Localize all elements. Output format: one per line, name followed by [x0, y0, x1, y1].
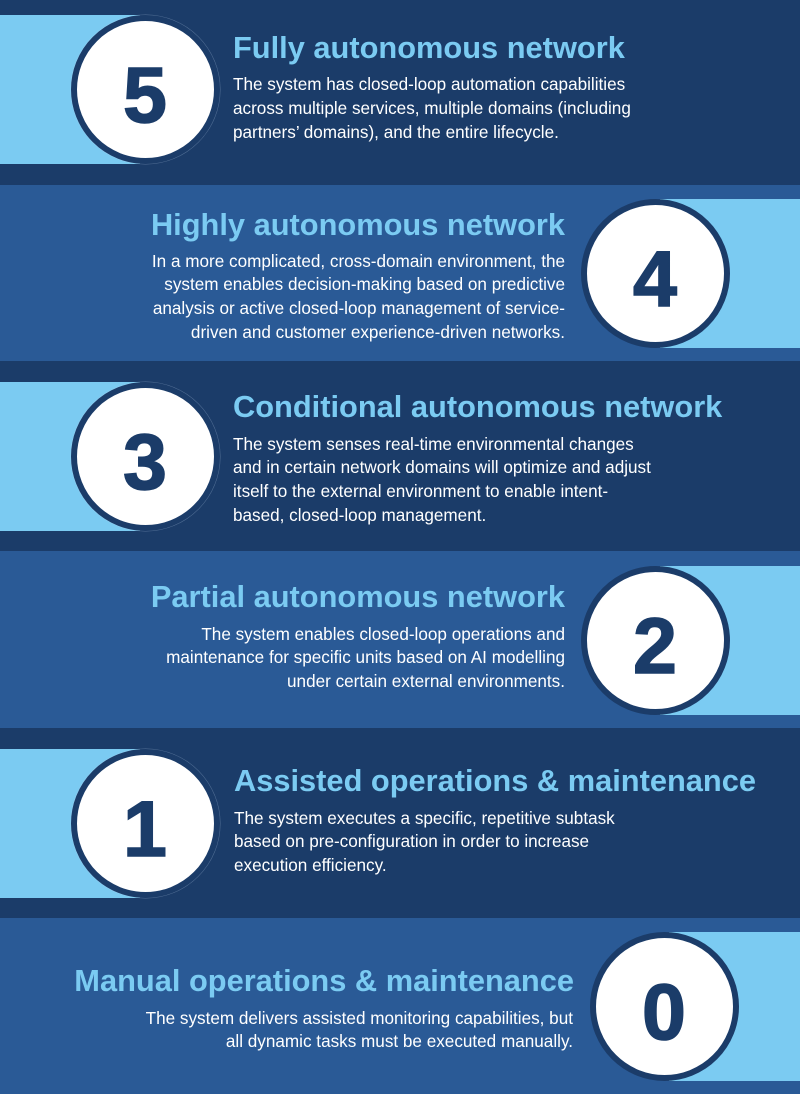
- level 5 description: The system has closed-loop automation capabilities: [233, 74, 625, 94]
- level 2 description: maintenance for specific units based on AI modelling: [166, 647, 565, 667]
- level 4 description: system enables decision-making based on predictive: [164, 274, 565, 294]
- panel: level 4: [0, 185, 800, 361]
- level 0 description: The system delivers assisted monitoring capabilities, but: [146, 1008, 573, 1028]
- level 4 description: driven and customer experience-driven networks.: [191, 322, 565, 342]
- level 2 description: The system enables closed-loop operations and: [201, 624, 565, 644]
- level 5 number badge: [70, 15, 220, 164]
- level 0 number badge: 0: [642, 967, 686, 1056]
- level 1 description: [234, 808, 615, 875]
- level 1 number badge: [70, 749, 220, 898]
- level 5 description: across multiple services, multiple domains (including: [233, 98, 631, 118]
- panel: level 5: [0, 0, 800, 185]
- level 4 description: In a more complicated, cross-domain environment, the: [152, 250, 565, 270]
- level 3 tab: [0, 382, 140, 531]
- level 2 heading: Partial autonomous network: [151, 579, 565, 614]
- level 0 heading: Manual operations & maintenance: [74, 963, 574, 998]
- level 2 tab: [660, 566, 800, 715]
- level 1 heading: Assisted operations & maintenance: [234, 763, 756, 798]
- panel: level 3: [0, 361, 800, 551]
- level 4 description: [152, 250, 565, 342]
- level 3 description: itself to the external environment to enable intent-: [233, 481, 608, 501]
- level 4 description: analysis or active closed-loop management of service-: [153, 298, 565, 318]
- panel: level 1: [0, 728, 800, 918]
- level 3 description: based, closed-loop management.: [233, 505, 486, 525]
- level 3 description: and in certain network domains will optimize and adjust: [233, 457, 651, 477]
- level 4 tab: [660, 199, 800, 348]
- level 1 description: execution efficiency.: [234, 855, 387, 875]
- level 5 description: partners’ domains), and the entire lifecycle.: [233, 122, 559, 142]
- level 5 heading: Fully autonomous network: [233, 30, 625, 65]
- level 3 number badge: 3: [123, 417, 167, 506]
- level 1 tab: [0, 749, 140, 898]
- level 4 number badge: 4: [633, 234, 677, 323]
- level 3 number badge: [70, 382, 220, 531]
- level 0 description: [146, 1008, 573, 1051]
- level 0 tab: [669, 932, 800, 1081]
- level 2 number badge: [580, 566, 730, 715]
- level 5 number badge: 5: [123, 50, 167, 139]
- level 3 heading: Conditional autonomous network: [233, 389, 722, 424]
- level 2 description: under certain external environments.: [287, 671, 565, 691]
- level 1 description: The system executes a specific, repetitive subtask: [234, 808, 615, 828]
- level 4 number badge: [580, 199, 730, 348]
- level 2 number badge: 2: [633, 601, 677, 690]
- level 1 description: based on pre-configuration in order to increase: [234, 831, 589, 851]
- level 0 description: all dynamic tasks must be executed manually.: [226, 1031, 573, 1051]
- level 5 tab: [0, 15, 140, 164]
- level 1 number badge: 1: [123, 784, 167, 873]
- level 0 number badge: [590, 932, 738, 1081]
- panel: level 2: [0, 551, 800, 728]
- level 2 description: [166, 624, 565, 691]
- level 3 description: The system senses real-time environmental changes: [233, 434, 634, 454]
- level 3 description: [233, 434, 651, 525]
- level 4 heading: Highly autonomous network: [151, 206, 565, 242]
- panel: level 0: [0, 918, 800, 1094]
- level 5 description: [233, 74, 631, 142]
